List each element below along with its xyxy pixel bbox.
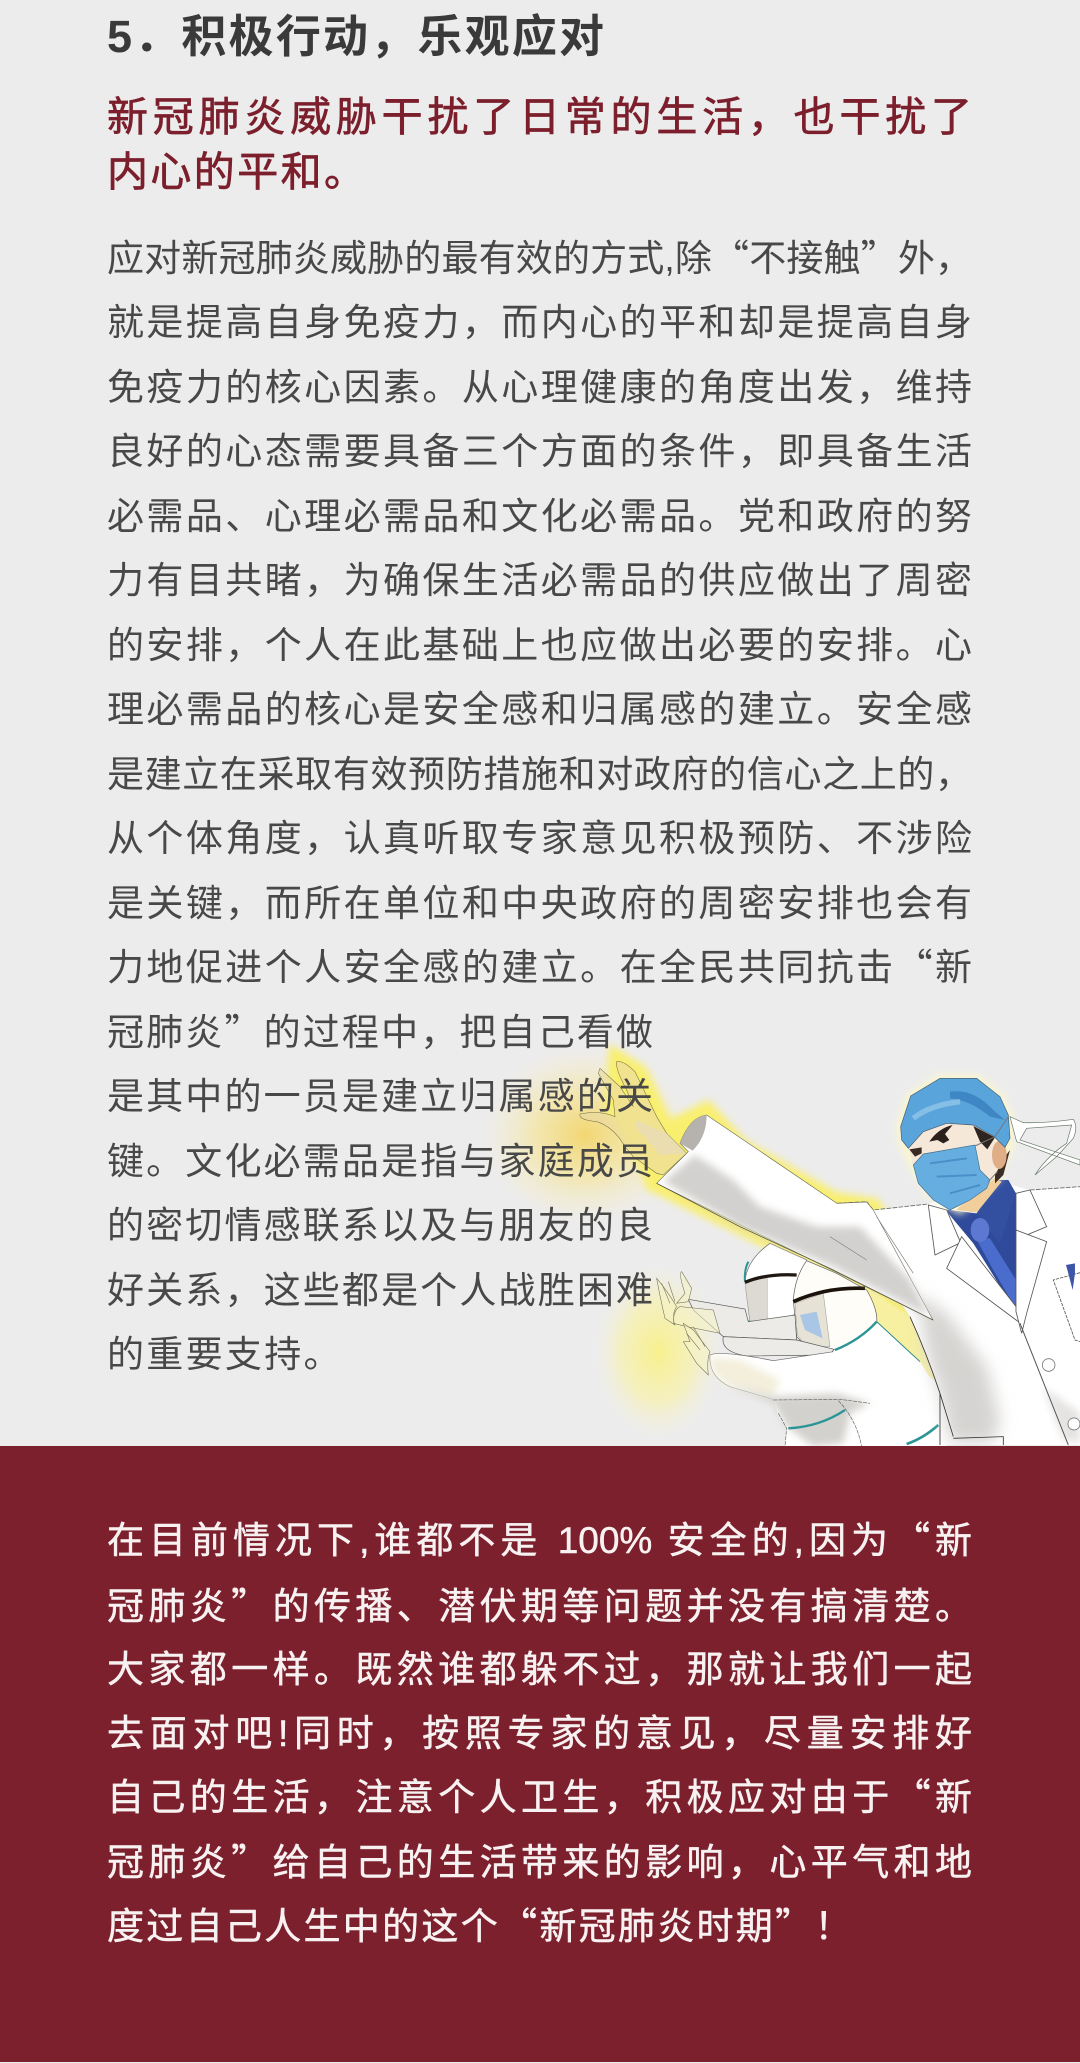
figure: doctor body xyxy=(837,1180,1080,1445)
yellow rim behind suit xyxy=(730,1237,943,1427)
figure: protective suit staff xyxy=(688,1237,947,1447)
subtitle: 新冠肺炎威胁干扰了日常的生活，也干扰了 xyxy=(107,94,972,140)
body text xyxy=(107,228,972,1375)
coat outline xyxy=(837,1187,1080,1210)
figure: raised sleeve and hand xyxy=(580,1061,933,1320)
body text: 必需品、心理必需品和文化必需品。党和政府的努 xyxy=(107,496,972,536)
body text: 好关系，这些都是个人战胜困难 xyxy=(107,1270,653,1310)
illustration: doctor and medical staff reaching out with glowing hands xyxy=(493,1040,1080,1446)
body text: 是关键，而所在单位和中央政府的周密安排也会有 xyxy=(107,882,972,924)
body text: 冠肺炎”的过程中，把自己看做 xyxy=(107,1002,653,1056)
ear xyxy=(992,1141,1007,1169)
panel: closing message: 自己的生活，注意个人卫生，积极应对由于“新 xyxy=(107,1767,972,1821)
body text: 的密切情感联系以及与朋友的良 xyxy=(107,1205,653,1246)
panel: closing message xyxy=(0,1446,1080,2062)
suit arm front xyxy=(710,1340,943,1427)
suit body xyxy=(773,1322,947,1447)
panel: closing message: 度过自己人生中的这个“新冠肺炎时期”！ xyxy=(107,1896,854,1950)
suit shading xyxy=(723,1383,870,1447)
body text: 是建立在采取有效预防措施和对政府的信心之上的， xyxy=(107,754,972,794)
title: 5．积极行动，乐观应对 xyxy=(107,11,606,62)
sleeve shading xyxy=(663,1155,930,1317)
lapels xyxy=(928,1205,961,1255)
body text: 从个体角度，认真听取专家意见积极预防、不涉险 xyxy=(107,818,972,859)
suit arm rear xyxy=(688,1299,797,1340)
face xyxy=(908,1123,1000,1207)
cap ties xyxy=(1010,1117,1080,1175)
body text: 力地促进个人安全感的建立。在全民共同抗击“新 xyxy=(107,937,972,991)
body text: 的安排，个人在此基础上也应做出必要的安排。心 xyxy=(107,624,972,666)
panel: closing message: 冠肺炎”的传播、潜伏期等问题并没有搞清楚。 xyxy=(107,1576,972,1630)
body text: 应对新冠肺炎威胁的最有效的方式,除“不接触”外， xyxy=(107,228,972,282)
suit details xyxy=(835,1322,877,1350)
body text: 是其中的一员是建立归属感的关 xyxy=(107,1076,653,1117)
glow: upper hand xyxy=(477,1043,933,1320)
panel: closing message: 在目前情况下,谁都不是 100% 安全的,因为“新 xyxy=(107,1510,972,1564)
body text: 免疫力的核心因素。从心理健康的角度出发，维持 xyxy=(107,366,972,408)
head halo xyxy=(900,1078,1010,1210)
chest pocket and pen xyxy=(1053,1273,1080,1342)
surgical cap xyxy=(901,1078,1010,1148)
coat buttons xyxy=(1042,1359,1055,1371)
shirt xyxy=(945,1180,1016,1312)
sleeve inner opening xyxy=(680,1115,707,1151)
body text: 的重要支持。 xyxy=(107,1334,343,1375)
panel: closing message: 冠肺炎”给自己的生活带来的影响，心平气和地 xyxy=(107,1832,972,1886)
panel: closing message: 去面对吧!同时，按照专家的意见，尽量安排好 xyxy=(107,1713,972,1754)
front suit hood xyxy=(793,1261,877,1350)
body text: 键。文化必需品是指与家庭成员 xyxy=(107,1140,653,1182)
neck xyxy=(957,1173,1002,1213)
glow: lower hands xyxy=(592,1262,724,1442)
coat shading xyxy=(917,1293,1000,1443)
subtitle xyxy=(107,94,972,195)
subtitle: 内心的平和。 xyxy=(107,149,367,195)
eyes xyxy=(909,1125,953,1157)
tie xyxy=(976,1238,1017,1310)
suit arm middle xyxy=(723,1337,834,1356)
coat xyxy=(837,1180,1080,1445)
panel: closing message: 大家都一样。既然谁都躲不过，那就让我们一起 xyxy=(107,1649,972,1690)
surgical mask xyxy=(913,1145,990,1210)
body text: 就是提高自身免疫力，而内心的平和却是提高自身 xyxy=(107,302,972,343)
body text: 良好的心态需要具备三个方面的条件，即具备生活 xyxy=(107,431,972,472)
raised hand xyxy=(580,1061,687,1175)
figure: doctor head xyxy=(900,1078,1080,1213)
body text: 力有目共睹，为确保生活必需品的供应做出了周密 xyxy=(107,560,972,601)
body text: 理必需品的核心是安全感和归属感的建立。安全感 xyxy=(107,689,972,730)
rear suit hood xyxy=(745,1243,807,1322)
sleeve xyxy=(657,1115,933,1320)
lower open hands xyxy=(657,1272,720,1375)
hair xyxy=(973,1126,995,1149)
